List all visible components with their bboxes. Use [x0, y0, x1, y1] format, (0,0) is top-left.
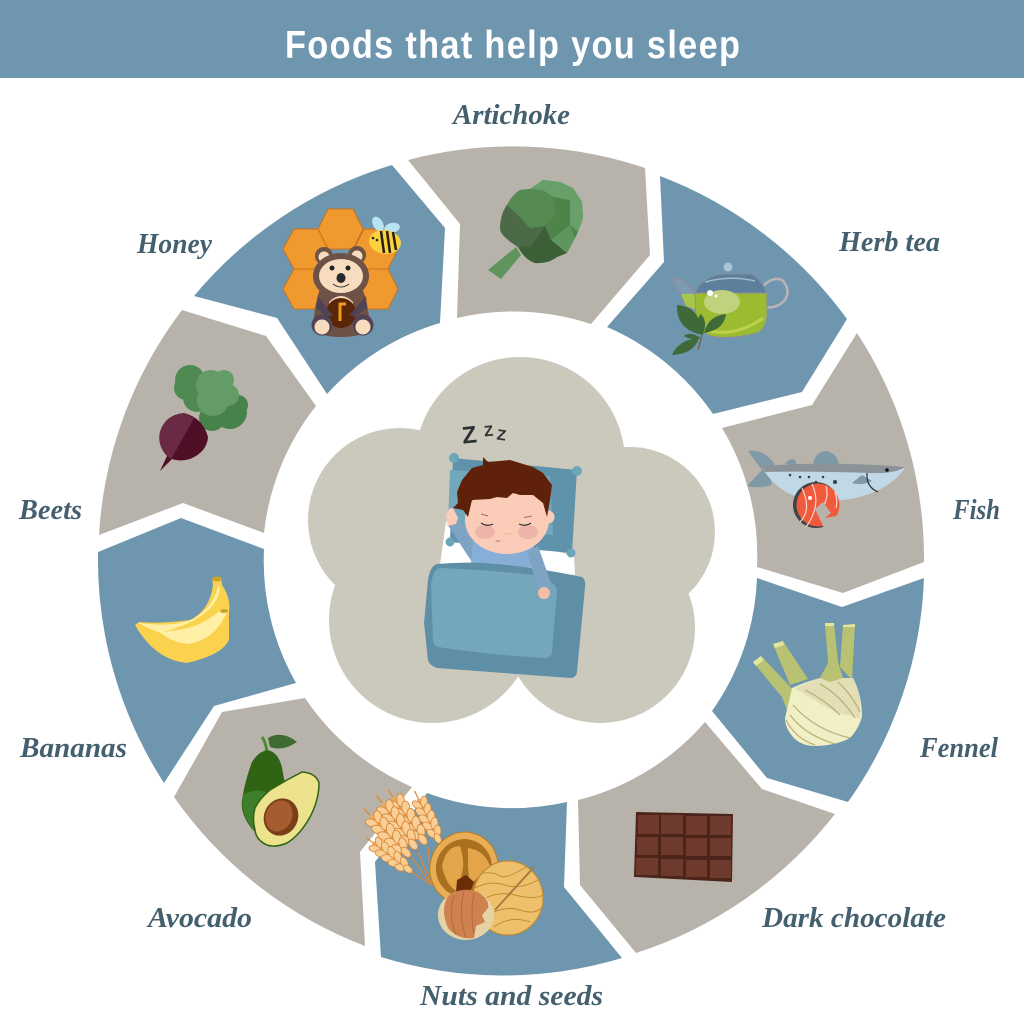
label: Beets: Beets	[18, 494, 82, 526]
panel: bananas segment	[98, 518, 296, 783]
ridged nut	[473, 861, 543, 935]
icon: honey bear with honeycomb and bee	[283, 209, 403, 337]
label: Fennel: Fennel	[919, 732, 999, 764]
label: Herb tea: Herb tea	[838, 226, 940, 258]
tea leaves	[672, 305, 726, 355]
whole avocado	[242, 750, 288, 835]
zzz snore text: Z	[496, 427, 507, 445]
right arm and hand	[527, 546, 552, 599]
blanket	[424, 563, 585, 678]
zzz snore text	[461, 421, 507, 450]
panel: honey segment	[194, 165, 445, 394]
walnut half	[422, 824, 506, 912]
label: Artichoke: Artichoke	[451, 99, 570, 131]
label: Fish: Fish	[952, 494, 1000, 526]
label: Honey: Honey	[136, 228, 212, 260]
panel: beets segment	[99, 310, 316, 535]
icon: avocado	[242, 735, 319, 846]
hazelnut	[438, 890, 494, 940]
beet leaves	[174, 365, 248, 431]
icon: bananas	[135, 576, 229, 663]
icon: artichoke	[488, 180, 583, 279]
bed sheet	[440, 522, 575, 575]
bee	[367, 215, 403, 256]
honeycomb	[283, 209, 398, 309]
pillow	[446, 453, 582, 558]
pajama torso	[471, 540, 535, 568]
zzz snore text: Z	[461, 421, 478, 450]
beet root	[159, 413, 208, 471]
title banner: Foods that help you sleep	[285, 23, 740, 66]
panel: avocado segment	[174, 698, 412, 946]
icon: nuts and wheat	[356, 783, 543, 940]
icon: fennel	[753, 623, 862, 746]
bear	[312, 246, 374, 337]
panel: fennel segment	[712, 578, 924, 802]
panel: nuts and seeds segment	[375, 793, 622, 975]
label: Avocado: Avocado	[146, 902, 252, 934]
head	[453, 457, 554, 554]
title banner	[0, 0, 1024, 78]
salmon steak	[793, 482, 842, 530]
avocado half	[254, 772, 319, 846]
stem and leaf	[262, 737, 267, 753]
icon: beet	[159, 365, 248, 471]
wheat ears	[356, 783, 449, 885]
label: Nuts and seeds: Nuts and seeds	[419, 980, 603, 1012]
panel: dark chocolate segment	[578, 722, 835, 953]
centre cloud	[308, 357, 715, 723]
panel: fish segment	[722, 333, 924, 593]
left arm and hand	[446, 508, 476, 562]
panel: artichoke segment	[408, 146, 650, 324]
zzz snore text: Z	[483, 423, 494, 440]
label: Dark chocolate: Dark chocolate	[761, 902, 946, 934]
icon: fish with salmon steak	[747, 451, 905, 530]
sleeping boy illustration	[424, 421, 585, 678]
label: Bananas: Bananas	[19, 732, 127, 764]
icon: herb tea pot	[672, 262, 788, 355]
icon: dark chocolate bar	[634, 812, 733, 882]
panel: herb tea segment	[607, 176, 847, 414]
